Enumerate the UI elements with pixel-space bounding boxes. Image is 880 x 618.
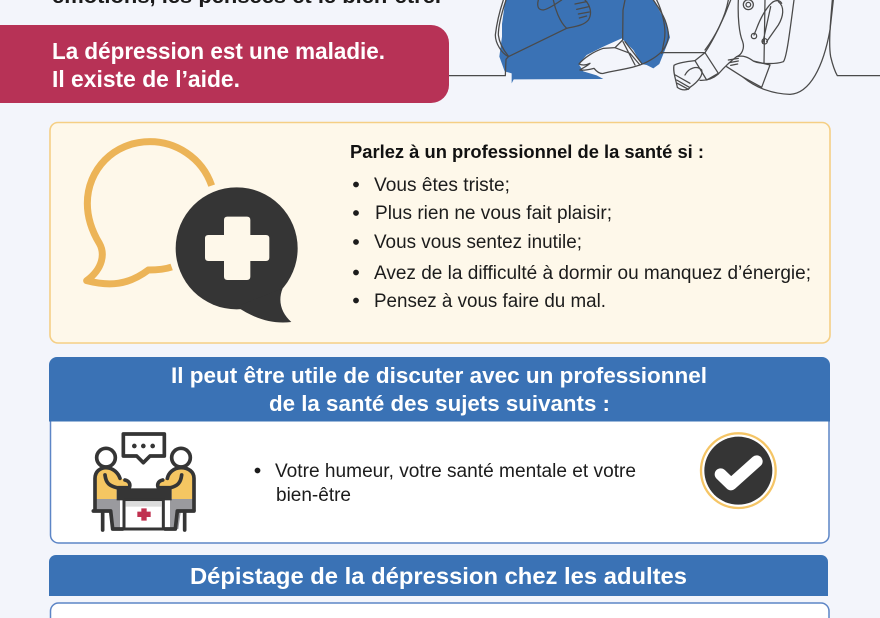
panel: topics to discuss: [49, 357, 830, 543]
symptom list: Pensez à vous faire du mal.: [374, 291, 606, 312]
panel: talk to a health professional: [50, 122, 830, 343]
symptom list: Vous êtes triste;: [374, 175, 510, 196]
panel header: useful to discuss: Il peut être utile de discuter avec un professionnel: [171, 363, 707, 388]
banner: depression is an illness: Il existe de l’aide.: [52, 66, 240, 92]
icon: speech bubbles with medical cross: [87, 142, 298, 322]
icon: check mark badge: [701, 433, 776, 508]
banner: depression is an illness: La dépression est une maladie.: [52, 38, 385, 64]
panel body: [50, 603, 829, 618]
panel header: depression screening in adults: Dépistage de la dépression chez les adultes: [190, 563, 687, 589]
icon: two people talking across a medical table: [93, 434, 194, 530]
panel header: useful to discuss: de la santé des sujets suivants :: [269, 391, 610, 416]
panel header: depression screening in adults: [49, 555, 828, 596]
symptom list: Plus rien ne vous fait plaisir;: [375, 203, 612, 224]
panel header: useful to discuss: [49, 357, 830, 422]
topic bullet text: bien-être: [276, 485, 351, 506]
symptom list: [353, 175, 811, 312]
topic bullet text: [255, 461, 636, 506]
symptom list: Avez de la difficulté à dormir ou manquez d’énergie;: [374, 263, 811, 284]
topic bullet text: Votre humeur, votre santé mentale et votre: [275, 461, 636, 482]
heading: talk to a professional if: Parlez à un professionnel de la santé si :: [350, 142, 704, 162]
banner: depression is an illness: [0, 25, 449, 103]
panel: adult depression screening: [49, 555, 829, 618]
illustration: patient and doctor line art: [449, 0, 880, 94]
symptom list: Vous vous sentez inutile;: [374, 232, 582, 253]
